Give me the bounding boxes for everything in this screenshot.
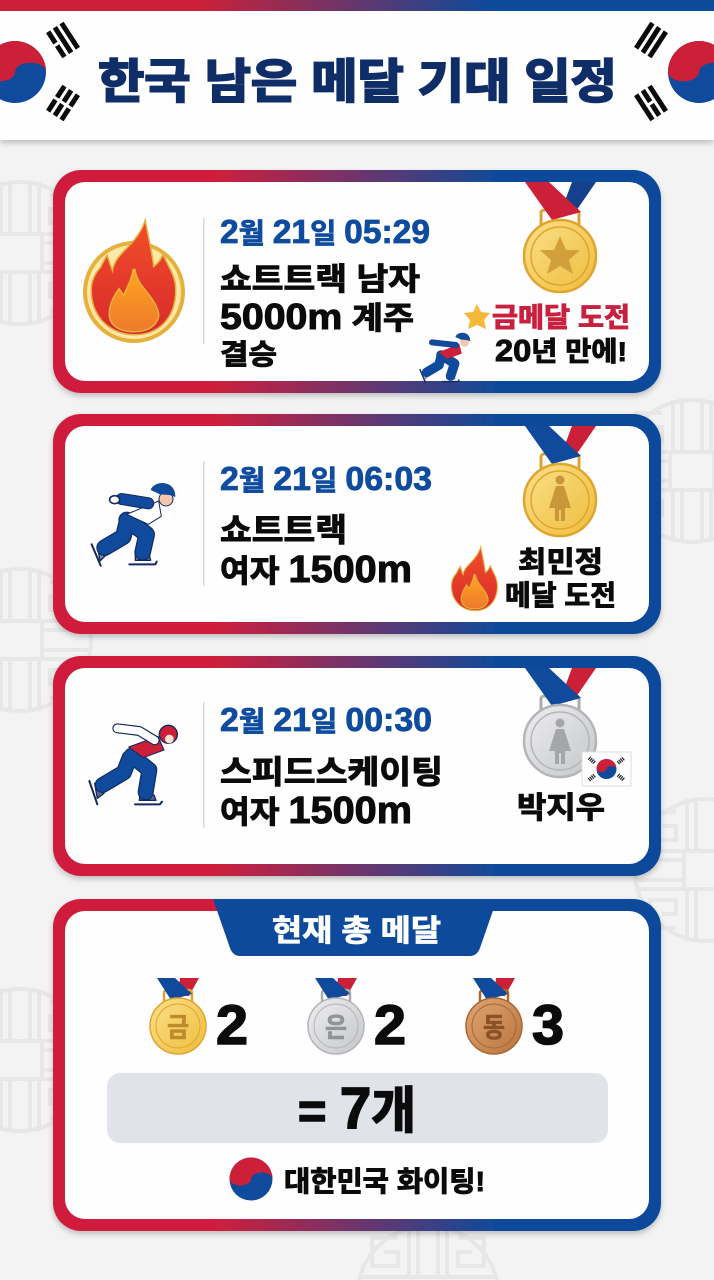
label: gold medal challenge: 금메달 도전: [492, 303, 630, 333]
icon: silver medal with athlete: [524, 668, 596, 777]
icon: right trigrams: [634, 22, 668, 121]
athlete name: 최민정: [518, 546, 603, 579]
event name: 쇼트트랙: [220, 512, 347, 548]
event name: 여자 1500m: [220, 549, 412, 591]
section tab: [213, 899, 627, 956]
icon: small flame: [452, 549, 497, 610]
title: 한국 남은 메달 기대 일정: [98, 55, 617, 108]
gold count: 2: [216, 993, 248, 1056]
bronze count: 3: [532, 993, 564, 1056]
icon: left trigrams: [46, 22, 80, 121]
total value: = 7개: [298, 1076, 416, 1141]
event name: 결승: [220, 339, 277, 370]
silver count: 2: [374, 993, 406, 1056]
event name: [220, 754, 443, 832]
icon: gold medal with star: [524, 182, 596, 292]
gold count: [150, 978, 248, 1056]
icon: left taegeuk: [0, 41, 46, 103]
icon: taegeuk: [230, 1158, 272, 1200]
icon: flame in gold medal: [85, 223, 183, 341]
tab heading: 현재 총 메달: [272, 915, 441, 948]
icon: star: [464, 304, 490, 329]
silver count: [308, 978, 406, 1056]
event name: 스피드스케이팅: [220, 754, 443, 790]
total box: [107, 1073, 608, 1143]
cheer slogan: 대한민국 화이팅!: [284, 1166, 485, 1197]
date and time: 2월 21일 05:29: [220, 213, 430, 250]
event name: 여자 1500m: [220, 790, 412, 832]
panel: current total medals: [53, 899, 661, 1231]
gold count: 금: [167, 1013, 189, 1043]
date and time: 2월 21일 00:30: [220, 701, 432, 738]
silver count: 은: [325, 1013, 347, 1043]
panel: short track men 5000m relay: [53, 170, 661, 393]
bronze count: [466, 978, 564, 1056]
panel: short track women 1500m: [53, 414, 661, 634]
bronze count: 동: [483, 1013, 505, 1043]
icon: right taegeuk: [668, 41, 714, 103]
icon: gold medal with athlete: [524, 426, 596, 536]
icon: small skater: [420, 333, 470, 382]
top colour bar: [0, 0, 714, 11]
event name: 5000m 계주: [220, 296, 414, 337]
icon: skater in red: [89, 725, 177, 804]
icon: skater in blue: [92, 483, 175, 566]
event name: 쇼트트랙 남자: [220, 262, 420, 297]
panel: speed skating women 1500m: [53, 656, 661, 876]
icon: Korean flag: [582, 752, 631, 786]
event name: [220, 262, 420, 370]
label: first in 20 years: 20년 만에!: [495, 333, 627, 368]
event name: [220, 512, 412, 591]
label: medal challenge: 메달 도전: [505, 580, 616, 611]
date and time: 2월 21일 06:03: [220, 460, 432, 497]
athlete name: 박지우: [517, 792, 605, 825]
header banner: [0, 0, 714, 140]
